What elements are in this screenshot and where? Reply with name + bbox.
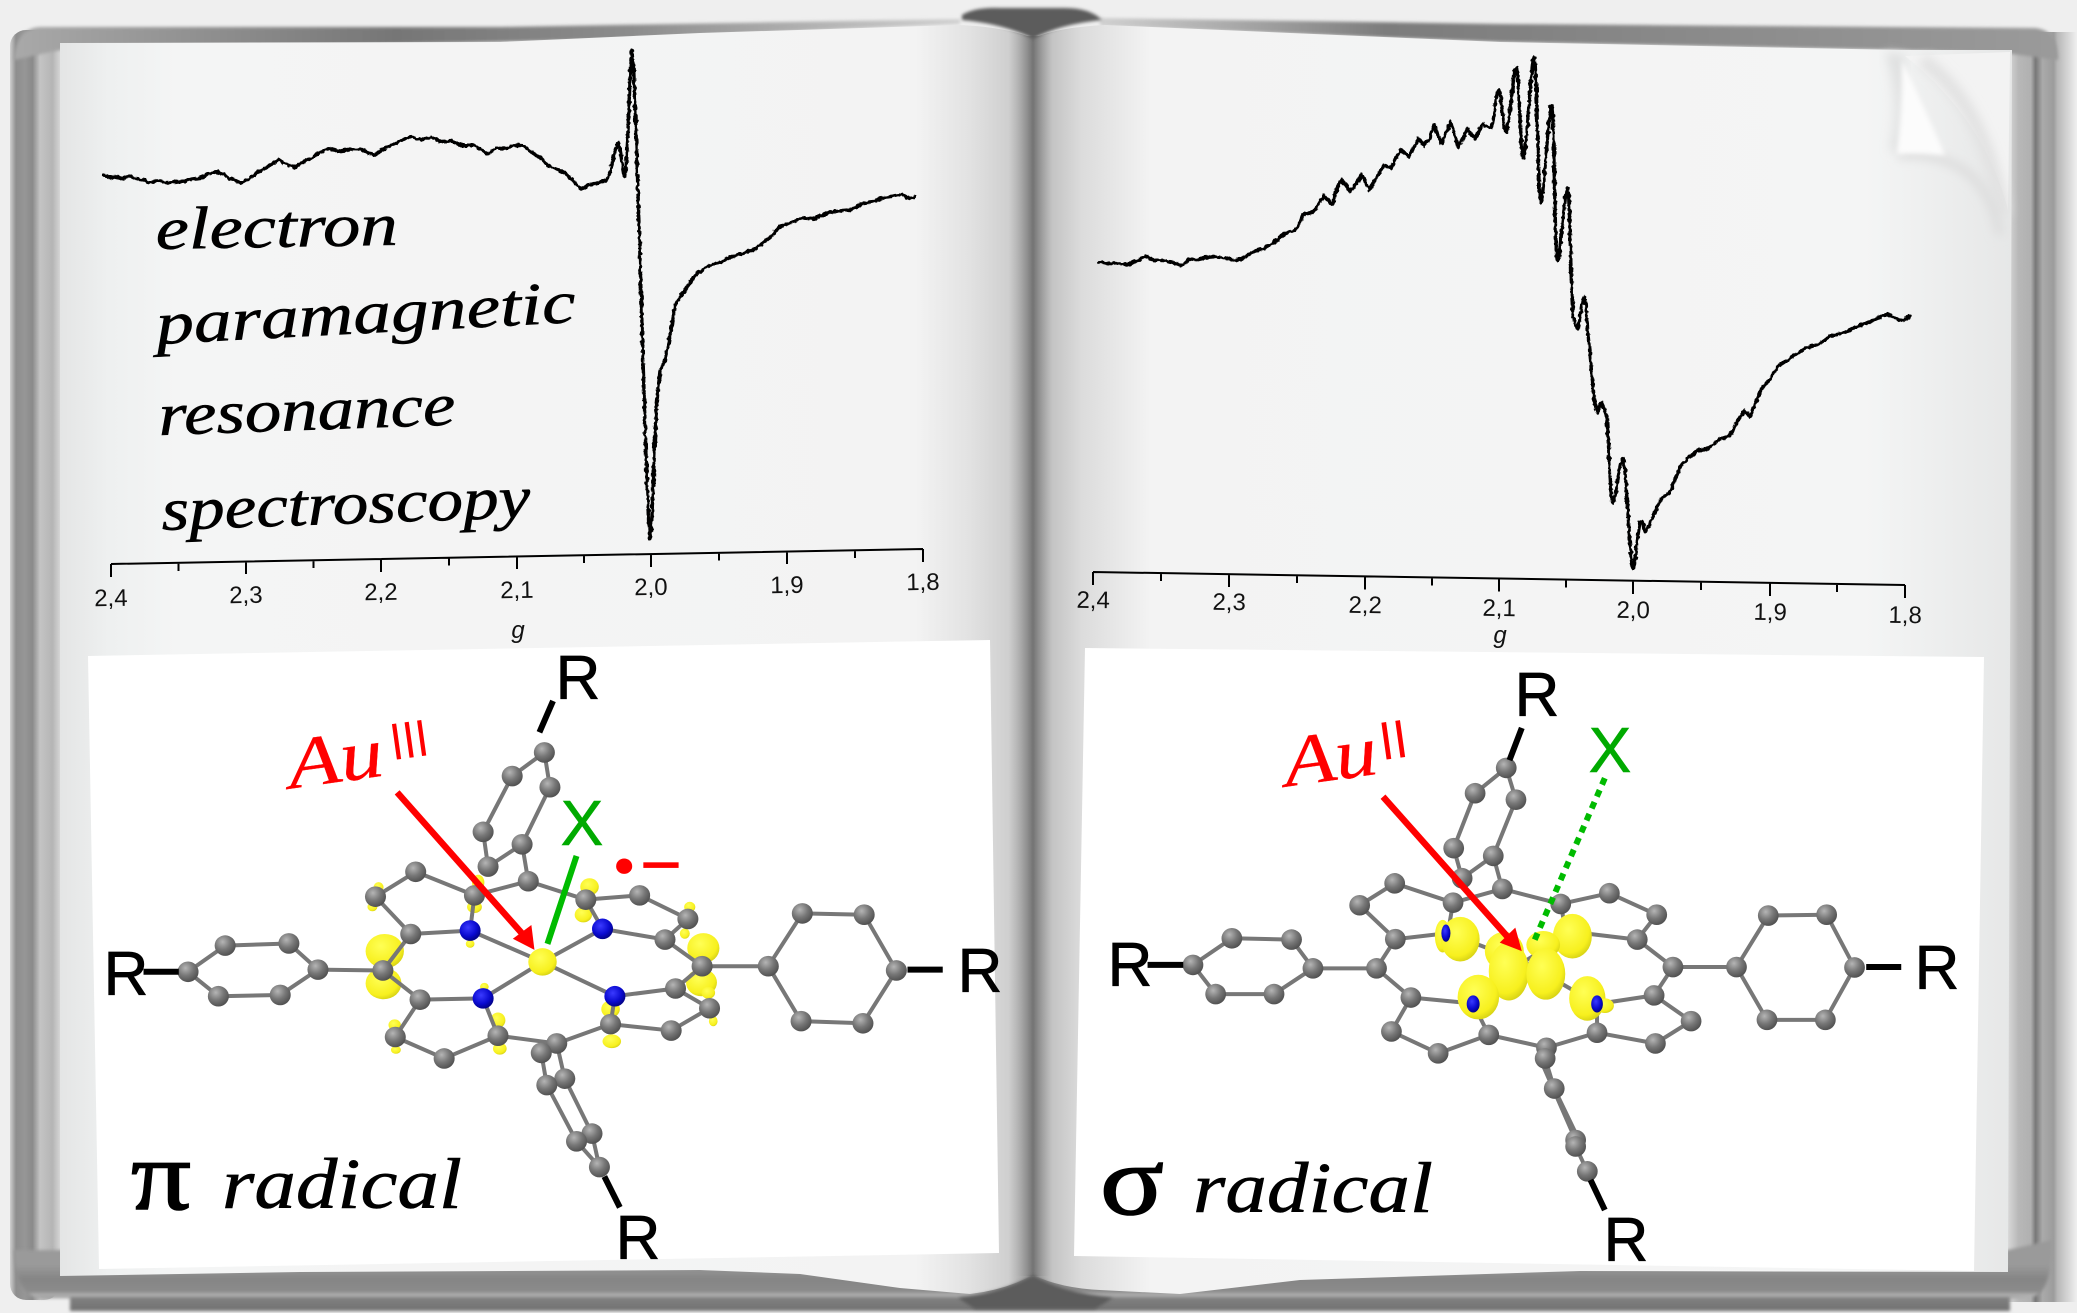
R bonds xyxy=(1148,728,1901,1210)
Au II label: II xyxy=(1375,709,1411,772)
spin density lobes xyxy=(366,875,719,1055)
g axis right: 2,1 xyxy=(1482,595,1516,622)
R labels: R xyxy=(556,644,600,713)
white card right xyxy=(1074,648,1984,1271)
g axis left xyxy=(94,549,940,644)
heading: electron paramagnetic resonance spectroscopy xyxy=(149,192,577,543)
g axis left: 2,3 xyxy=(229,582,263,609)
Au III label: III xyxy=(386,709,432,772)
g axis right: 2,4 xyxy=(1076,587,1110,614)
g axis right xyxy=(1076,572,1922,649)
sigma radical label xyxy=(1100,1125,1433,1236)
sigma radical label: radical xyxy=(1193,1148,1433,1228)
g axis right: 2,2 xyxy=(1348,592,1382,619)
panel: sigma radical xyxy=(1074,648,1984,1275)
nitrogen atoms xyxy=(1441,925,1603,1013)
g axis right: 2,0 xyxy=(1616,597,1650,624)
R labels xyxy=(1108,661,1959,1275)
Au II label xyxy=(1273,706,1414,803)
R bonds xyxy=(144,701,943,1207)
g axis left: 2,4 xyxy=(94,585,128,612)
R labels: R xyxy=(1108,931,1152,1000)
X label: X xyxy=(561,787,603,859)
book right page xyxy=(1033,25,2012,1294)
page curl xyxy=(1885,52,2010,235)
R labels: R xyxy=(1915,934,1959,1003)
spin density lobes xyxy=(1435,914,1614,1021)
heading: electron paramagnetic resonance spectroscopy: resonance xyxy=(157,372,456,448)
dotted green axial bond xyxy=(1533,778,1605,943)
EPR spectrum curve right xyxy=(1099,57,1910,568)
R labels: R xyxy=(616,1204,660,1273)
heading: electron paramagnetic resonance spectroscopy: paramagnetic xyxy=(149,269,577,357)
R labels: R xyxy=(104,940,148,1009)
g axis right: 1,8 xyxy=(1888,602,1922,629)
radical anion mark xyxy=(616,858,679,874)
heading: electron paramagnetic resonance spectroscopy: electron xyxy=(155,192,398,262)
g axis left: 1,9 xyxy=(770,572,804,599)
pi radical label xyxy=(131,1120,462,1231)
panel: left spectrum xyxy=(94,50,940,644)
g axis left: 2,1 xyxy=(500,577,534,604)
EPR spectrum curve left xyxy=(104,50,915,539)
Au III label xyxy=(277,705,435,805)
book left page xyxy=(60,25,1033,1294)
g axis right: 1,9 xyxy=(1753,599,1787,626)
R labels: R xyxy=(1515,661,1559,730)
nitrogen atoms xyxy=(460,919,625,1009)
panel: pi radical xyxy=(88,640,1002,1273)
bonds xyxy=(1193,768,1855,1171)
R labels: R xyxy=(1604,1206,1648,1275)
carbon atoms xyxy=(178,742,907,1177)
g axis left: g xyxy=(511,617,525,644)
red arrow to gold xyxy=(397,792,534,950)
gold atom xyxy=(528,948,557,976)
green axial bond xyxy=(547,856,577,944)
white card left xyxy=(88,640,999,1269)
pi radical label: radical xyxy=(222,1144,462,1224)
molecule: sigma radical xyxy=(1148,728,1901,1210)
g axis left: 2,0 xyxy=(634,574,668,601)
sigma radical label: σ xyxy=(1100,1125,1164,1236)
Au II label: Au xyxy=(1273,710,1382,803)
g axis right: g xyxy=(1493,622,1507,649)
g axis right: 2,3 xyxy=(1212,589,1246,616)
R labels xyxy=(104,644,1002,1273)
bonds xyxy=(188,752,896,1167)
red arrow to gold xyxy=(1383,797,1522,951)
molecule: pi radical xyxy=(144,701,943,1207)
g axis left: 1,8 xyxy=(906,569,940,596)
book spine xyxy=(958,8,1113,1309)
Au III label: Au xyxy=(277,712,388,805)
panel: right spectrum xyxy=(1076,57,1922,649)
carbon atoms xyxy=(1183,758,1865,1182)
g axis left: 2,2 xyxy=(364,579,398,606)
pi radical label: π xyxy=(131,1120,191,1231)
heading: electron paramagnetic resonance spectroscopy: spectroscopy xyxy=(160,464,532,543)
R labels: R xyxy=(958,937,1002,1006)
X label: X xyxy=(1589,714,1631,786)
